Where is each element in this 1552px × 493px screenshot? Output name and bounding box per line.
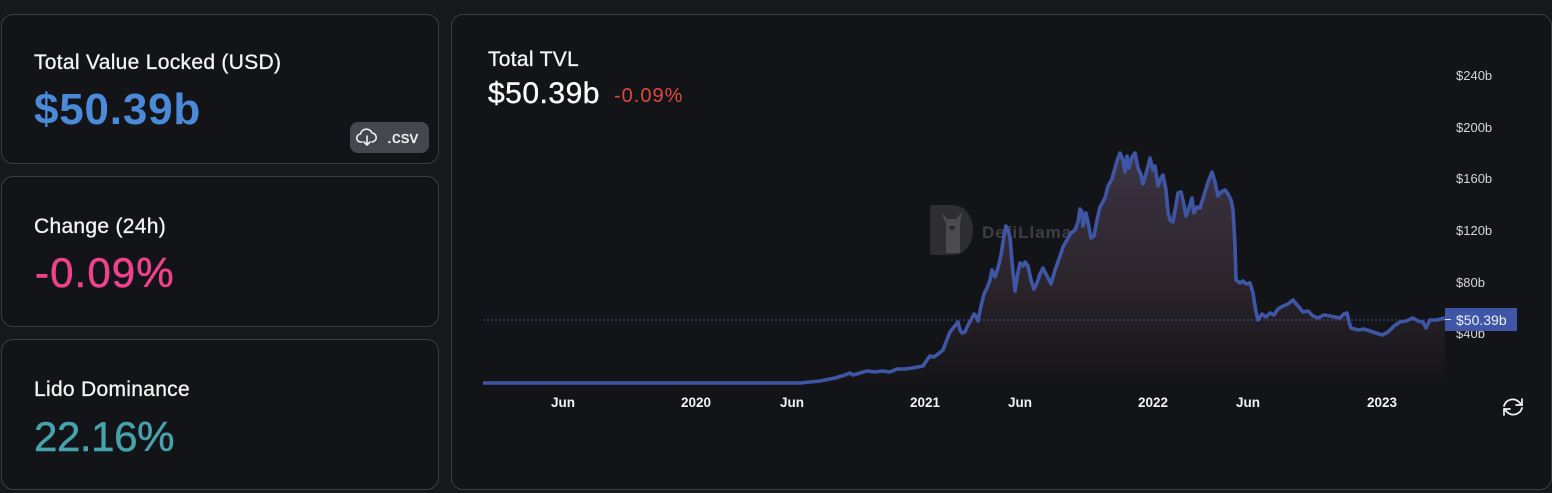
tvl line xyxy=(483,153,1445,383)
label: csv: .csv xyxy=(387,128,418,147)
y axis: $80b: $80b xyxy=(1456,275,1485,290)
price tag: $50.39b xyxy=(1445,308,1517,331)
x axis: 2020: 2020 xyxy=(681,395,711,410)
value: tvl change: -0.09% xyxy=(614,85,683,107)
x axis: jun: Jun xyxy=(1236,395,1260,410)
label: lido dominance: Lido Dominance xyxy=(34,378,190,401)
watermark: defillama logo xyxy=(930,205,1072,255)
y axis: $160b: $160b xyxy=(1456,171,1492,186)
x axis: 2022: 2022 xyxy=(1138,395,1168,410)
y axis: $40b: $40b xyxy=(1456,326,1485,341)
price tag: $50.39b: $50.39b xyxy=(1456,312,1507,328)
y axis: $200b: $200b xyxy=(1456,120,1492,135)
price line xyxy=(483,319,1445,321)
label: total value locked: Total Value Locked (USD) xyxy=(34,51,281,74)
button: csv download xyxy=(350,122,429,153)
x axis: jun: Jun xyxy=(551,395,575,410)
x axis: jun: Jun xyxy=(780,395,804,410)
icon: cloud download xyxy=(356,128,377,146)
y axis: $120b: $120b xyxy=(1456,223,1492,238)
x axis: 2023: 2023 xyxy=(1367,395,1397,410)
value: total value locked: $50.39b xyxy=(34,85,201,134)
x axis: 2021: 2021 xyxy=(910,395,940,410)
icon: reset refresh xyxy=(1503,398,1523,416)
label: change 24h: Change (24h) xyxy=(34,215,166,238)
panel: total tvl chart xyxy=(451,14,1552,490)
heading: total tvl: Total TVL xyxy=(488,48,579,71)
y axis: $240b: $240b xyxy=(1456,68,1492,83)
value: total tvl: $50.39b xyxy=(488,77,600,110)
panel: total value locked xyxy=(1,14,439,164)
panel: change 24h xyxy=(1,176,439,327)
x axis: jun: Jun xyxy=(1008,395,1032,410)
value: lido dominance: 22.16% xyxy=(34,413,174,460)
panel: lido dominance xyxy=(1,339,439,490)
value: change 24h: -0.09% xyxy=(35,249,175,296)
area fill xyxy=(483,153,1445,385)
watermark: defillama logo: DefiLlama xyxy=(982,223,1072,242)
